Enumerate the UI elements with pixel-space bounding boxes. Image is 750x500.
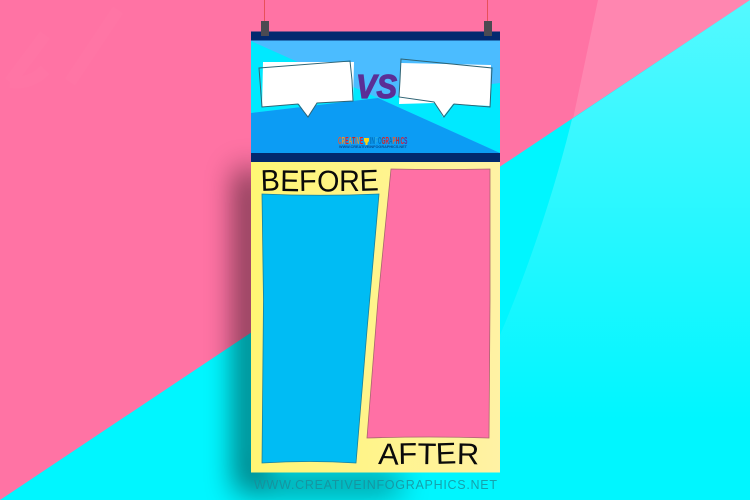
speech bubble: left — [259, 61, 354, 117]
before panel — [262, 194, 379, 463]
after panel — [367, 169, 490, 438]
top navy bar — [251, 32, 500, 40]
header shape: left cyan — [251, 41, 378, 113]
logo url: WWW.CREATIVEINFOGRAPHICS.NET — [339, 145, 408, 149]
hanging clip: right — [484, 0, 492, 36]
poster — [251, 32, 500, 472]
before heading: BEFORE — [260, 164, 379, 199]
logo wordmark: infographics: INFOGRAPHICS — [370, 135, 407, 147]
background: faint corner marks — [10, 10, 118, 82]
after heading: AFTER — [378, 437, 479, 472]
poster shadow — [236, 170, 400, 492]
header shape: lower blue — [251, 98, 500, 153]
speech bubble: right — [399, 59, 492, 117]
logo — [338, 135, 408, 149]
poster paper — [251, 160, 500, 472]
header panel — [251, 32, 500, 162]
bottom navy bar — [251, 153, 500, 162]
header background: light blue — [251, 40, 500, 154]
logo icon: light bulb — [364, 138, 369, 145]
background: cyan sheen — [500, 0, 750, 420]
hanging clip: left — [261, 0, 269, 36]
logo wordmark: creative: CREATIVE — [338, 135, 363, 147]
website watermark: WWW.CREATIVEINFOGRAPHICS.NET — [254, 478, 497, 492]
background: pink sheen — [572, 0, 750, 120]
header shape: right cyan — [378, 83, 500, 153]
VS label: VS — [356, 68, 397, 105]
